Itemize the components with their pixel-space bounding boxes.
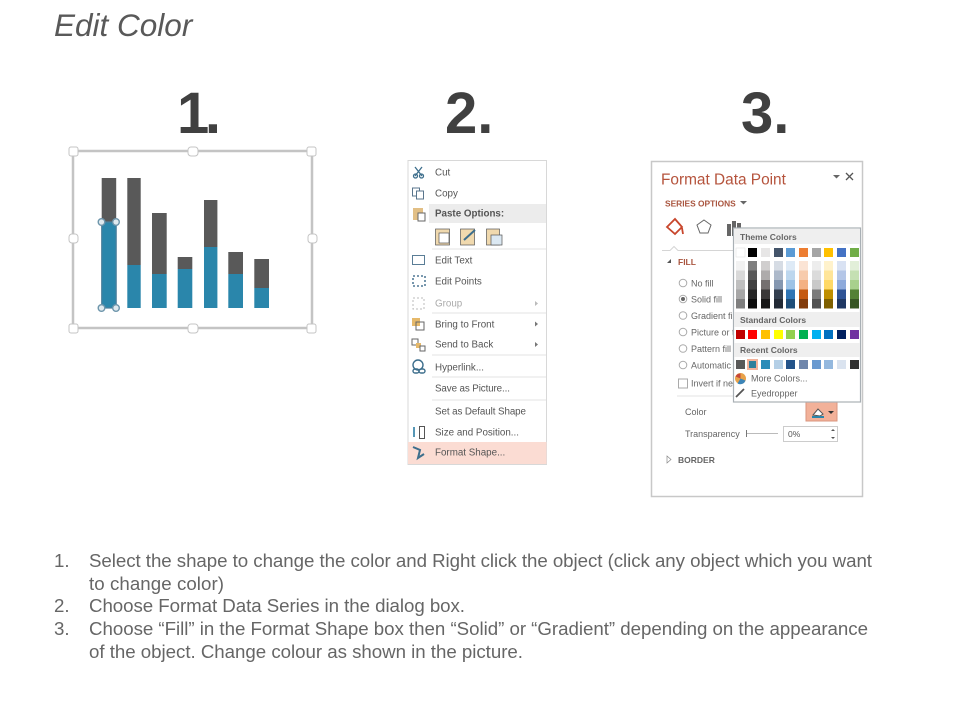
menu labels: Edit Points bbox=[435, 276, 482, 288]
border section heading: BORDER bbox=[678, 455, 715, 465]
menu labels: Edit Text bbox=[435, 256, 473, 266]
menu labels: Cut bbox=[435, 168, 451, 178]
color control bbox=[685, 402, 837, 421]
panel: selected bar chart bbox=[69, 147, 317, 333]
theme colors header: Theme Colors bbox=[740, 232, 797, 242]
icon: bring to front bbox=[412, 318, 424, 330]
recent colors header bbox=[734, 343, 860, 357]
step number 3: 3. bbox=[741, 81, 789, 146]
fill options: Invert if ne bbox=[691, 378, 733, 388]
panel: context menu bbox=[408, 160, 546, 464]
menu labels: Group bbox=[435, 298, 463, 310]
icon: copy bbox=[412, 188, 424, 199]
series options heading: SERIES OPTIONS bbox=[665, 198, 736, 208]
colour picker popup bbox=[734, 228, 860, 402]
transparency control: 0% bbox=[788, 429, 801, 439]
instructions text: to change color) bbox=[89, 573, 224, 594]
fill options: Pattern fill bbox=[691, 344, 731, 354]
fill section heading: FILL bbox=[678, 257, 696, 267]
tab divider bbox=[662, 246, 734, 250]
pane close controls bbox=[833, 173, 853, 180]
divider bbox=[677, 395, 733, 397]
instructions text: 2. bbox=[54, 595, 70, 616]
menu labels: Size and Position... bbox=[435, 428, 519, 438]
fill options bbox=[678, 278, 737, 388]
instructions text: Choose Format Data Series in the dialog box. bbox=[89, 595, 465, 616]
menu labels: Send to Back bbox=[435, 340, 493, 350]
paste options highlight bbox=[429, 204, 546, 223]
fill options: No fill bbox=[691, 278, 714, 288]
icon: size and position bbox=[414, 426, 424, 438]
instructions text: 3. bbox=[54, 618, 70, 639]
popup background bbox=[734, 228, 860, 402]
menu labels bbox=[435, 168, 527, 458]
menu separators bbox=[432, 249, 546, 400]
transparency control: Transparency bbox=[685, 429, 740, 439]
theme colors header bbox=[734, 229, 860, 244]
fill options: Solid fill bbox=[691, 294, 722, 304]
menu labels: Format Shape... bbox=[435, 448, 505, 458]
eyedropper item: Eyedropper bbox=[751, 388, 798, 398]
icon: send to back bbox=[412, 339, 425, 351]
icon: hyperlink bbox=[413, 360, 425, 373]
icon: group bbox=[413, 298, 424, 309]
menu labels: Save as Picture... bbox=[435, 384, 510, 394]
theme color row bbox=[736, 248, 859, 257]
transparency control bbox=[685, 426, 838, 442]
instructions text: Select the shape to change the color and Right click the object (click any object which you want bbox=[89, 550, 873, 571]
icon: fill bucket bbox=[667, 219, 683, 234]
instructions text: of the object. Change colour as shown in the picture. bbox=[89, 641, 523, 662]
icon: paste bbox=[413, 208, 425, 221]
menu background bbox=[408, 160, 546, 464]
menu labels: Set as Default Shape bbox=[435, 406, 527, 418]
recent colors header: Recent Colors bbox=[740, 345, 798, 355]
fill options: Picture or t bbox=[691, 328, 735, 338]
data point handles bbox=[98, 219, 119, 311]
pane title: Format Data Point bbox=[661, 172, 787, 188]
icon: edit points bbox=[413, 276, 425, 286]
recent color row bbox=[736, 359, 859, 370]
step number 2: 2. bbox=[445, 81, 493, 146]
icon: chart bbox=[727, 221, 741, 236]
submenu arrows bbox=[535, 301, 538, 347]
format shape highlight bbox=[408, 442, 546, 464]
title: Edit Color bbox=[54, 7, 194, 43]
instructions text: Choose “Fill” in the Format Shape box then “Solid” or “Gradient” depending on the appearance bbox=[89, 618, 868, 639]
icon: pentagon bbox=[697, 220, 711, 233]
menu labels: Hyperlink... bbox=[435, 362, 484, 374]
theme color shades bbox=[736, 261, 859, 308]
step number 1: 1. bbox=[177, 81, 221, 146]
standard colors header bbox=[734, 312, 860, 327]
fill options: Automatic bbox=[691, 360, 732, 370]
instructions text: 1. bbox=[54, 550, 70, 571]
icon: edit text bbox=[412, 256, 424, 264]
fill options: Gradient fill bbox=[691, 311, 737, 321]
icon: format shape bbox=[413, 447, 424, 458]
color control: Color bbox=[685, 407, 707, 417]
icons: paste option buttons bbox=[436, 229, 502, 245]
instructions text bbox=[54, 550, 873, 662]
selection frame bbox=[69, 147, 317, 333]
menu labels: Bring to Front bbox=[435, 320, 495, 330]
more colors item bbox=[735, 373, 808, 384]
stacked bars bbox=[102, 178, 269, 308]
panel: format data point bbox=[652, 162, 862, 496]
standard colors header: Standard Colors bbox=[740, 315, 806, 325]
fill section heading bbox=[667, 257, 696, 267]
icon: cut bbox=[414, 167, 424, 178]
menu labels: Copy bbox=[435, 188, 458, 200]
menu labels: Paste Options: bbox=[435, 208, 504, 220]
more colors item: More Colors... bbox=[751, 374, 808, 384]
standard color row bbox=[736, 330, 859, 339]
pane background bbox=[652, 162, 862, 496]
